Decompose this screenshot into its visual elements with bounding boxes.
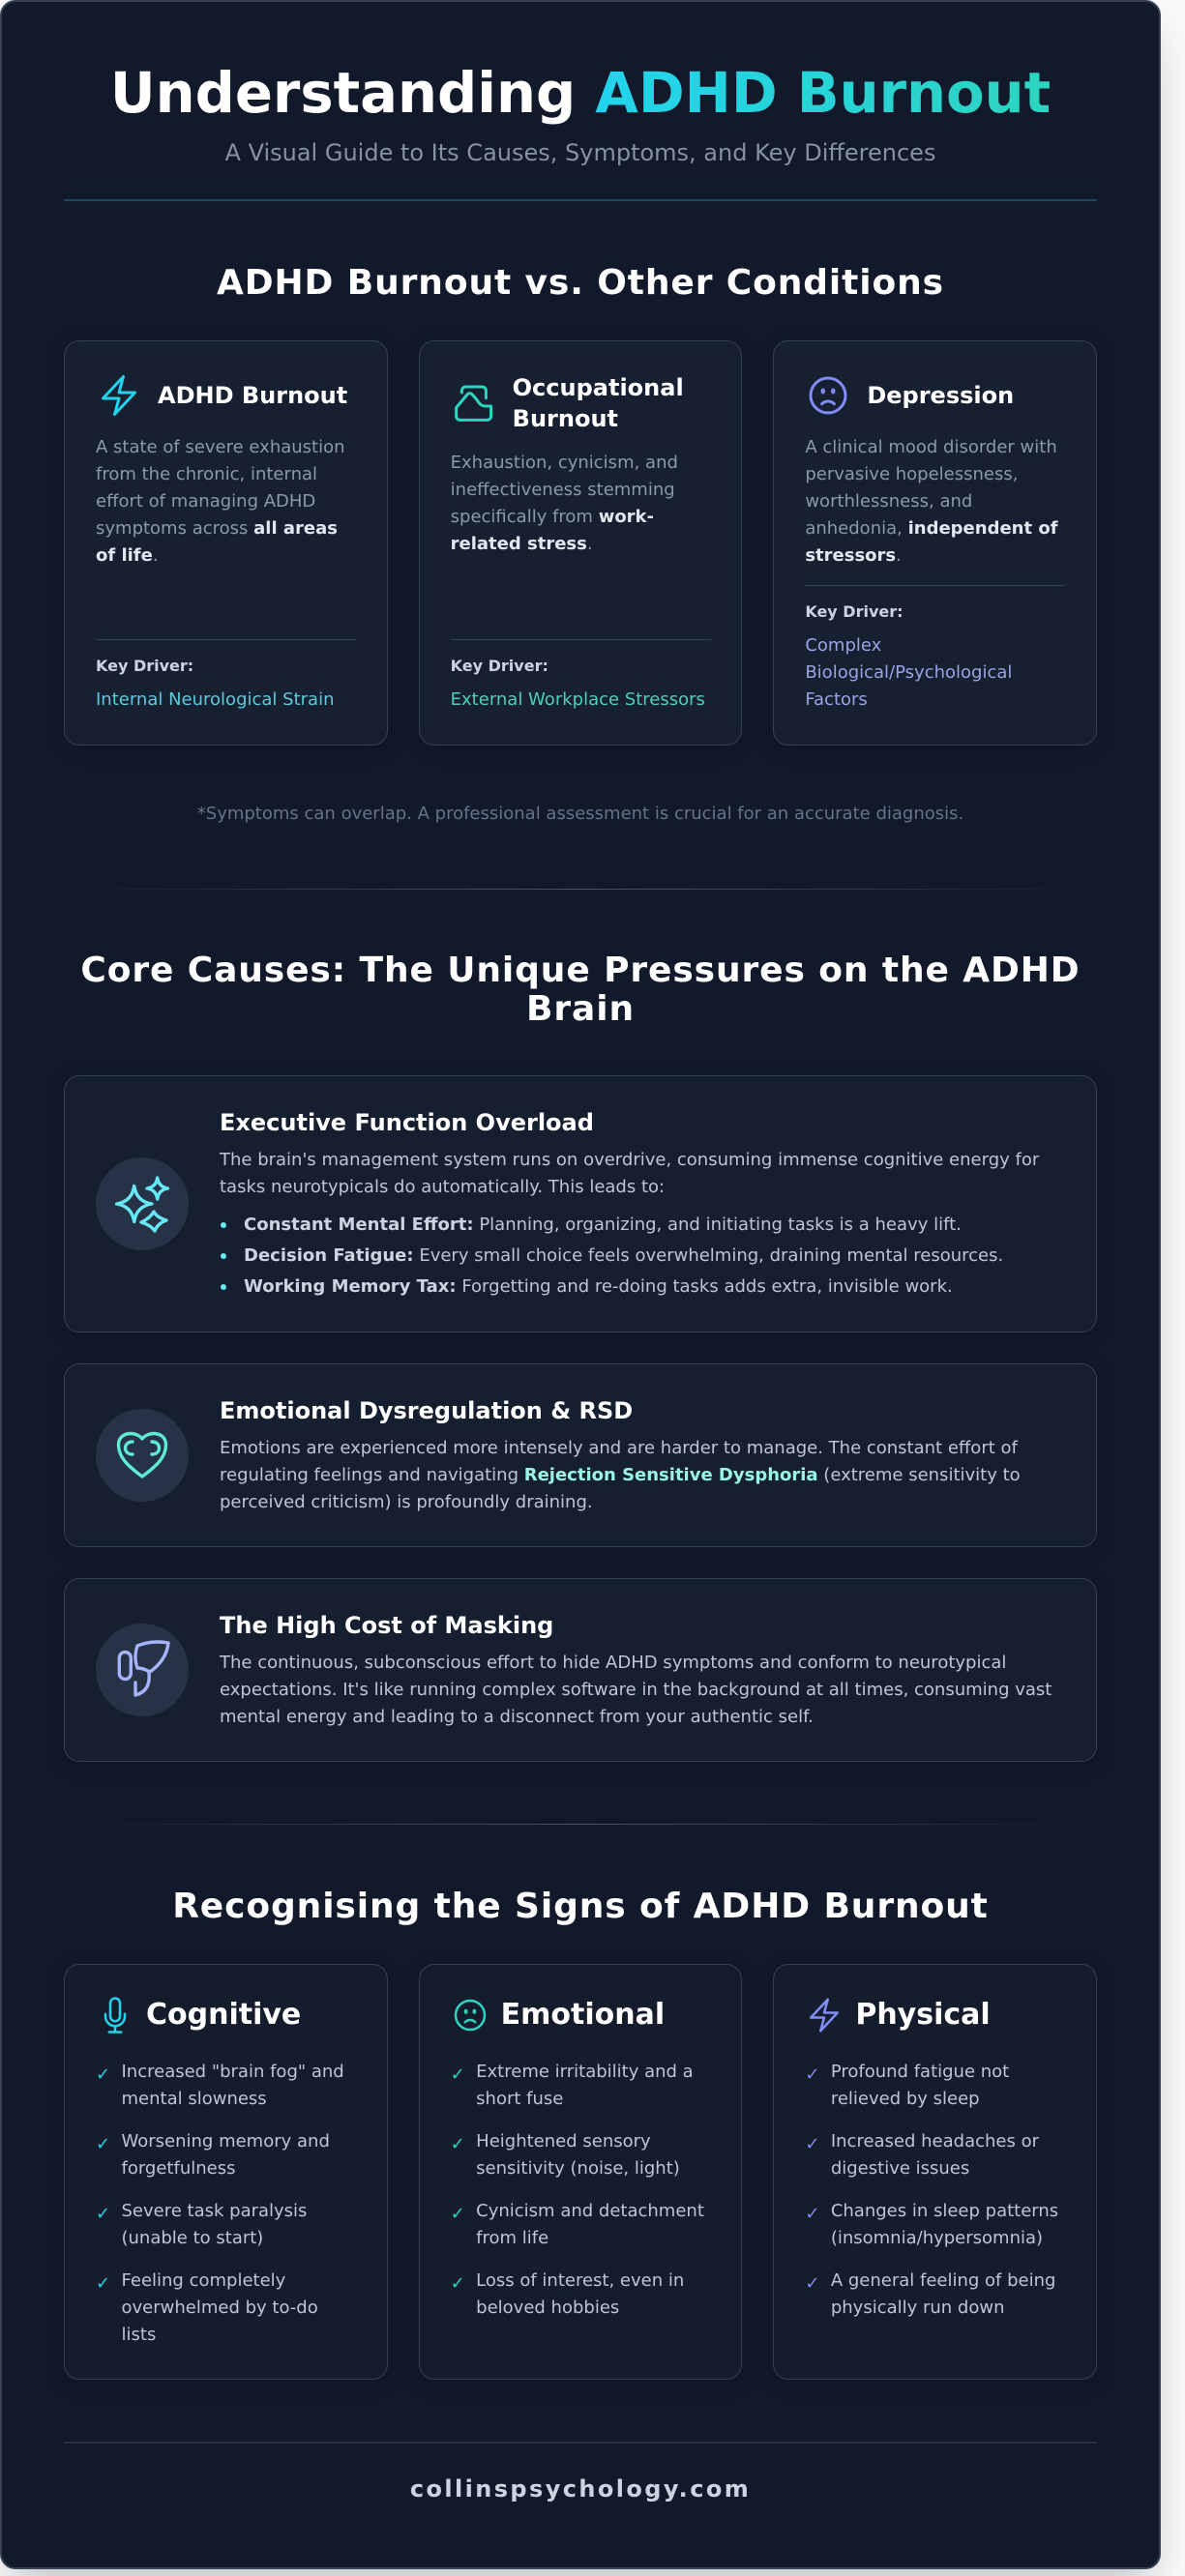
checklist: Increased "brain fog" and [122, 2062, 344, 2082]
checklist: relieved by sleep [831, 2089, 980, 2109]
checklist: ✓ [805, 2134, 819, 2154]
key driver label: Key Driver: [96, 657, 193, 675]
description: from the chronic, internal [96, 464, 317, 484]
description: of life. [96, 545, 159, 566]
checklist: ✓ [805, 2064, 819, 2085]
description [805, 437, 1058, 566]
cause description: expectations. It's like running complex software in the background at all times, consuming vast [220, 1680, 1052, 1700]
cause description: The brain's management system runs on overdrive, consuming immense cognitive energy for [220, 1150, 1039, 1170]
checklist: Profound fatigue not [831, 2062, 1009, 2082]
checklist: Cynicism and detachment [476, 2201, 704, 2221]
bullet list [221, 1215, 1003, 1297]
checklist: ✓ [805, 2204, 819, 2224]
checklist: Worsening memory and [122, 2131, 330, 2152]
description: worthlessness, and [805, 491, 972, 512]
card heading: Occupational [513, 374, 684, 401]
checklist: Extreme irritability and a [476, 2062, 694, 2082]
card heading: Cognitive [146, 1998, 301, 2032]
footnote: *Symptoms can overlap. A professional assessment is crucial for an accurate diagnosis. [197, 804, 963, 824]
panel: Executive Function Overload [64, 1075, 1097, 1332]
description [451, 453, 678, 554]
heading: core causes: Brain [526, 989, 635, 1029]
description: pervasive hopelessness, [805, 464, 1018, 484]
header divider [64, 199, 1097, 201]
checklist: Loss of interest, even in [476, 2270, 684, 2291]
checklist: ✓ [96, 2273, 110, 2294]
key driver label: Key Driver: [451, 657, 548, 675]
description: ineffectiveness stemming [451, 480, 675, 500]
icon: lightning bolt [810, 1998, 839, 2033]
checklist: ✓ [451, 2204, 465, 2224]
icon: frowning face [809, 377, 847, 414]
checklist: Severe task paralysis [122, 2201, 307, 2221]
description: symptoms across all areas [96, 518, 338, 539]
title: Understanding ADHD Burnout [110, 61, 1051, 126]
cause description [219, 1150, 1039, 1197]
panel: Physical signs [773, 1964, 1097, 2380]
checklist: digestive issues [831, 2158, 969, 2179]
description: specifically from work- [451, 507, 654, 527]
icon: mask [96, 1624, 189, 1716]
card heading: Depression [867, 382, 1014, 409]
checklist: beloved hobbies [476, 2298, 619, 2318]
panel: Emotional Dysregulation & RSD [64, 1363, 1097, 1547]
description: stressors. [805, 545, 902, 566]
bullet list: Decision Fatigue: Every small choice feels overwhelming, draining mental resources. [244, 1245, 1003, 1266]
key driver value: Complex [805, 635, 881, 656]
key driver value: Internal Neurological Strain [96, 689, 334, 710]
description: Exhaustion, cynicism, and [451, 453, 678, 473]
checklist: physically run down [831, 2298, 1005, 2318]
key driver value [805, 635, 1012, 710]
footer website: collinspsychology.com [410, 2475, 751, 2503]
card heading: Emotional [501, 1998, 665, 2032]
cause description: perceived criticism) is profoundly draining. [220, 1492, 593, 1512]
checklist: ✓ [96, 2134, 110, 2154]
checklist: Increased headaches or [831, 2131, 1039, 2152]
checklist: (unable to start) [122, 2228, 263, 2248]
checklist: A general feeling of being [831, 2270, 1055, 2291]
description: A clinical mood disorder with [805, 437, 1057, 457]
card heading [513, 374, 684, 432]
icon: lightning bolt [102, 375, 136, 416]
cause description: Emotions are experienced more intensely and are harder to manage. The constant effort of [220, 1438, 1018, 1458]
cause description [220, 1438, 1021, 1512]
checklist: Changes in sleep patterns [831, 2201, 1058, 2221]
icon: occupational burnout [455, 385, 493, 422]
checklist: ✓ [96, 2064, 110, 2085]
card heading: ADHD Burnout [158, 382, 347, 409]
checklist: short fuse [476, 2089, 563, 2109]
card heading: Burnout [513, 405, 618, 432]
checklist: ✓ [451, 2134, 465, 2154]
description: related stress. [451, 534, 593, 554]
cause heading: The High Cost of Masking [220, 1612, 553, 1639]
checklist [451, 2062, 704, 2318]
cause description: tasks neurotypicals do automatically. This leads to: [220, 1177, 665, 1197]
key driver label: Key Driver: [805, 602, 904, 621]
checklist: mental slowness [122, 2089, 267, 2109]
checklist: ✓ [805, 2273, 819, 2294]
checklist: Feeling completely [122, 2270, 285, 2291]
checklist: sensitivity (noise, light) [476, 2158, 680, 2179]
checklist: (insomnia/hypersomnia) [831, 2228, 1043, 2248]
heading: core causes [80, 951, 1081, 1029]
subtitle: A Visual Guide to Its Causes, Symptoms, and Key Differences [225, 139, 935, 166]
checklist: Heightened sensory [476, 2131, 651, 2152]
heading: core causes: Core Causes: The Unique Pressures on the ADHD [80, 951, 1081, 990]
checklist: lists [122, 2325, 156, 2345]
description: anhedonia, independent of [805, 518, 1058, 539]
key driver value: Factors [805, 689, 868, 710]
cause heading: Emotional Dysregulation & RSD [220, 1397, 633, 1424]
icon: frowning face [455, 2000, 486, 2031]
checklist: forgetfulness [122, 2158, 235, 2179]
cause description: regulating feelings and navigating Rejection Sensitive Dysphoria (extreme sensitivity to [220, 1465, 1021, 1485]
checklist: ✓ [96, 2204, 110, 2224]
panel: Cognitive signs [64, 1964, 388, 2380]
panel: Depression [773, 340, 1097, 746]
description: A state of severe exhaustion [96, 437, 345, 457]
bullet list: Working Memory Tax: Forgetting and re-doing tasks adds extra, invisible work. [244, 1276, 953, 1297]
checklist [96, 2062, 344, 2345]
description: effort of managing ADHD [96, 491, 315, 512]
panel: ADHD Burnout [64, 340, 388, 746]
cause description: mental energy and leading to a disconnect from your authentic self. [220, 1707, 814, 1727]
cause description [219, 1653, 1052, 1727]
heading: comparison: ADHD Burnout vs. Other Conditions [217, 263, 944, 303]
key driver value: External Workplace Stressors [451, 689, 705, 710]
checklist: ✓ [451, 2273, 465, 2294]
cause heading: Executive Function Overload [220, 1109, 594, 1136]
checklist: from life [476, 2228, 548, 2248]
checklist: ✓ [451, 2064, 465, 2085]
key driver value: Biological/Psychological [805, 662, 1012, 683]
description [96, 437, 345, 566]
icon: microphone [104, 1997, 126, 2034]
card heading: Physical [855, 1998, 991, 2032]
icon: heart [96, 1409, 189, 1502]
panel: The High Cost of Masking [64, 1578, 1097, 1762]
cause description: The continuous, subconscious effort to hide ADHD symptoms and conform to neurotypical [220, 1653, 1006, 1673]
icon: sparkles [96, 1157, 189, 1250]
checklist [805, 2062, 1058, 2318]
panel: Emotional signs [419, 1964, 742, 2380]
checklist: overwhelmed by to-do [122, 2298, 318, 2318]
bullet list: Constant Mental Effort: Planning, organizing, and initiating tasks is a heavy lift. [244, 1215, 962, 1235]
panel: Occupational Burnout [419, 340, 742, 746]
heading: signs: Recognising the Signs of ADHD Burnout [172, 1887, 989, 1926]
